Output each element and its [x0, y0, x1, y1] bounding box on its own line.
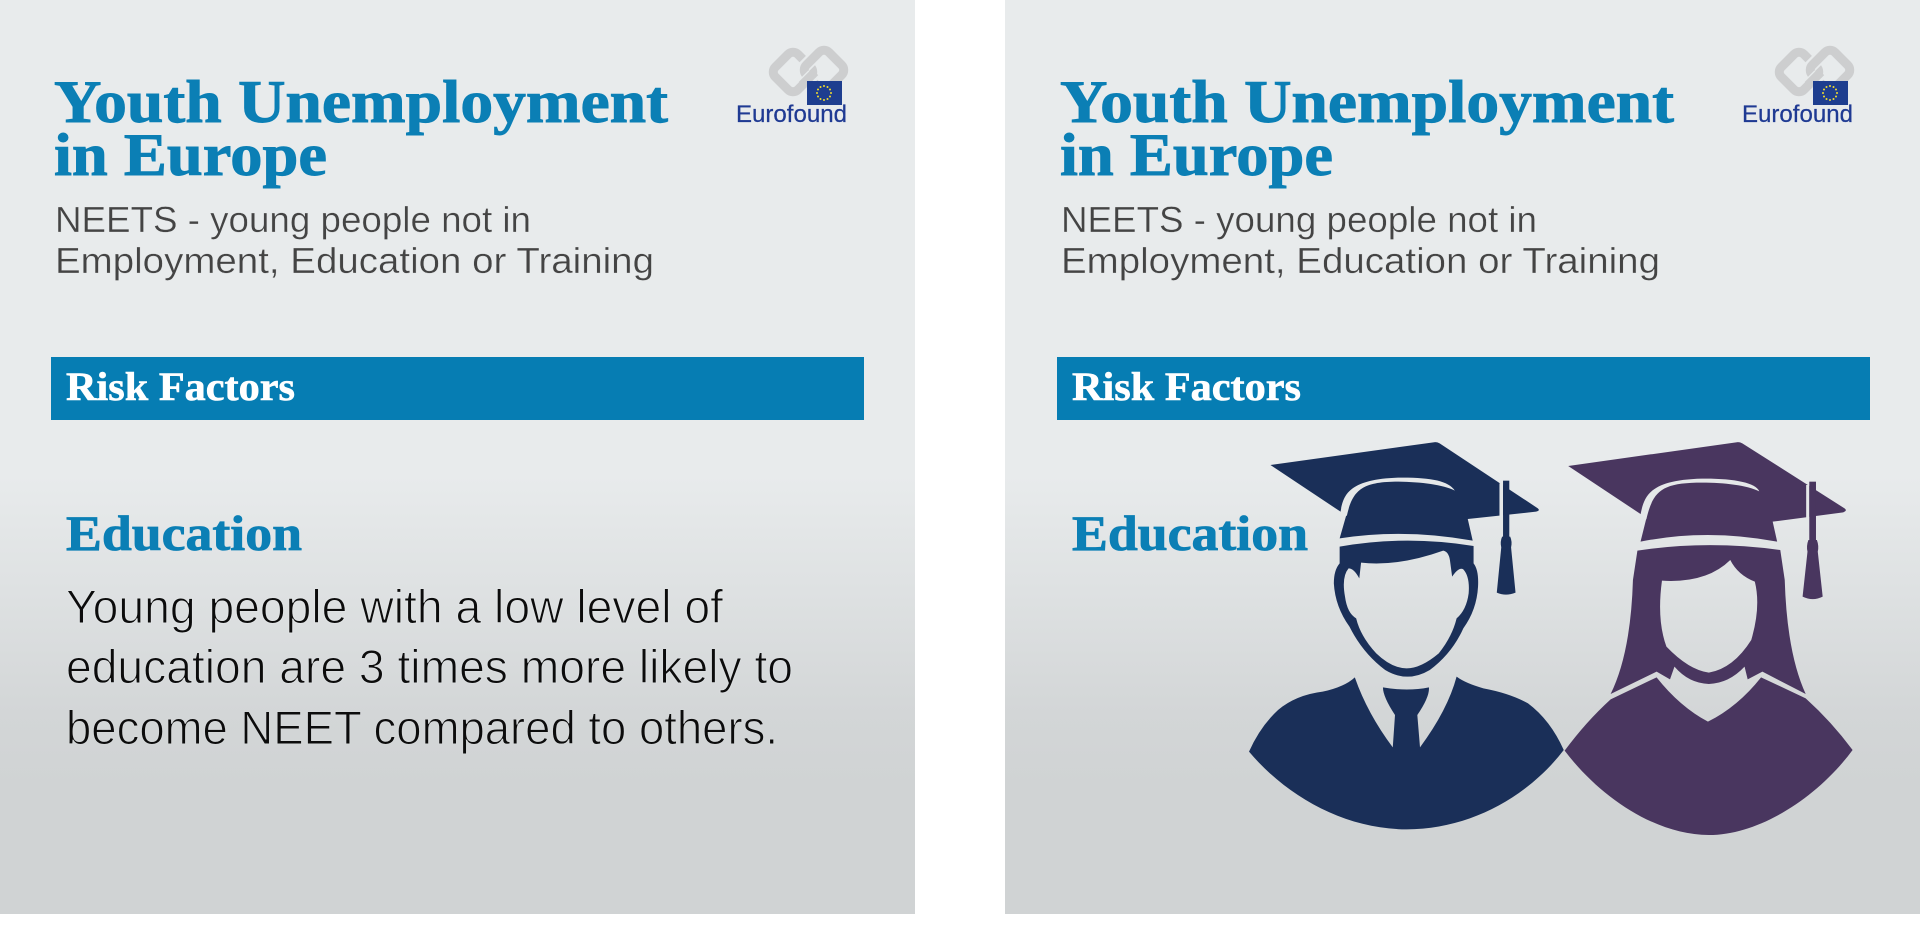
- logo: Eurofound left: Eurofound: [736, 101, 847, 128]
- logo: Eurofound right: Eurofound: [1742, 101, 1853, 128]
- title left: [54, 69, 668, 188]
- panel: graduates illustration: [1005, 0, 1920, 914]
- body text: become NEET compared to others.: [66, 701, 778, 754]
- subtitle left: Employment, Education or Training: [55, 240, 654, 281]
- risk factors bar right: [1057, 357, 1870, 420]
- subtitle left: [55, 199, 654, 281]
- risk factors bar left: [51, 357, 864, 420]
- title right: in Europe: [1060, 122, 1333, 188]
- panel background right: [1005, 0, 1920, 914]
- title right: Youth Unemployment: [1060, 69, 1674, 135]
- subtitle right: NEETS - young people not in: [1061, 199, 1537, 240]
- heading: education left: Education: [66, 505, 302, 561]
- icon: female graduate: [1565, 442, 1853, 835]
- subtitle right: Employment, Education or Training: [1061, 240, 1660, 281]
- subtitle right: [1061, 199, 1660, 281]
- heading: education right: Education: [1072, 505, 1308, 561]
- body text: education are 3 times more likely to: [66, 640, 793, 693]
- icon: male graduate: [1249, 442, 1564, 829]
- logo: Eurofound right: [1742, 47, 1853, 128]
- risk factors bar left: Risk Factors: [66, 364, 295, 409]
- title right: [1060, 69, 1674, 188]
- subtitle left: NEETS - young people not in: [55, 199, 531, 240]
- body text: Young people with a low level of: [66, 580, 724, 633]
- panel background left: [0, 0, 915, 914]
- logo: Eurofound left: [736, 47, 847, 128]
- risk factors bar right: Risk Factors: [1072, 364, 1301, 409]
- title left: Youth Unemployment: [54, 69, 668, 135]
- body text: [66, 580, 793, 754]
- title left: in Europe: [54, 122, 327, 188]
- panel: education text: [0, 0, 915, 914]
